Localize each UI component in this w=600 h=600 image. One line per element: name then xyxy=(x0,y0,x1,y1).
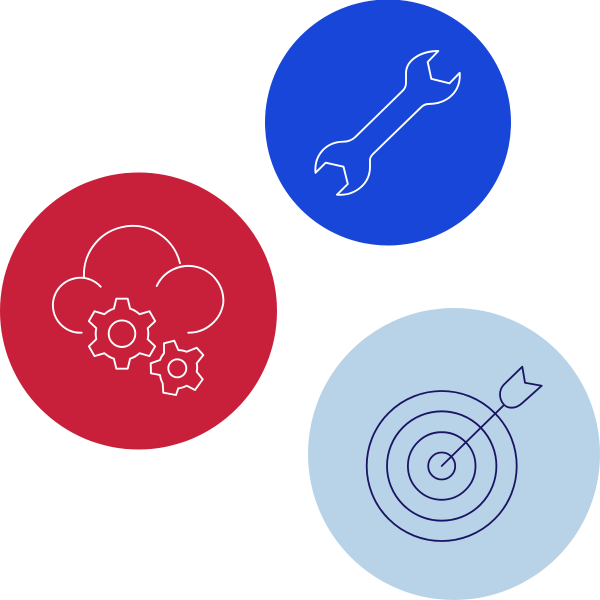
icon: arrow xyxy=(442,367,542,466)
panel: red circle with cloud and gears xyxy=(0,172,277,450)
icon: wrench xyxy=(315,51,460,195)
panel: blue circle with wrench xyxy=(265,0,511,246)
panel: light blue circle with target xyxy=(308,308,600,600)
icon: small gear xyxy=(151,341,203,395)
icon: target rings xyxy=(367,391,517,541)
icon: cloud xyxy=(53,226,223,333)
icon: large gear xyxy=(85,299,159,369)
